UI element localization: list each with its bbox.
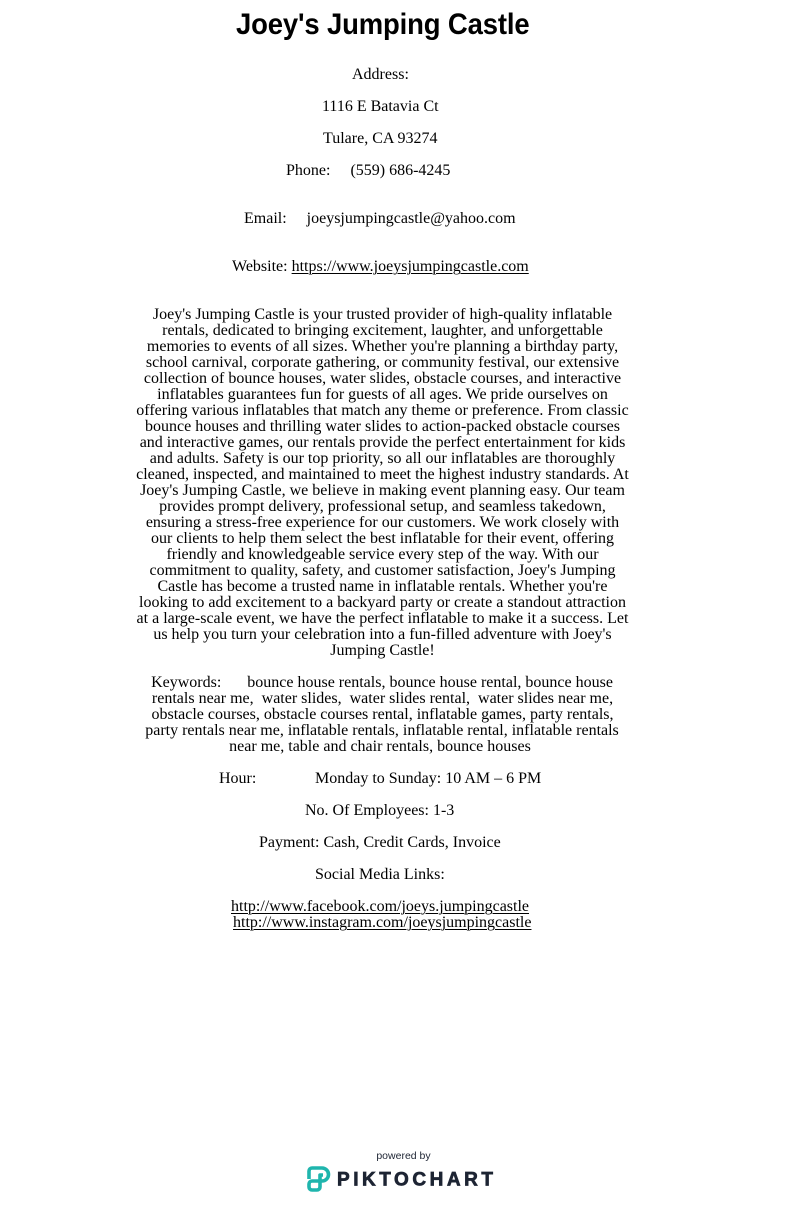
business description: inflatables guarantees fun for guests of all ages. We pride ourselves on (157, 386, 608, 403)
business description: collection of bounce houses, water slides, obstacle courses, and interactive (144, 370, 621, 387)
number of employees: No. Of Employees: 1-3 (305, 802, 454, 819)
city and zip: Tulare, CA 93274 (323, 130, 438, 147)
business description: commitment to quality, safety, and customer satisfaction, Joey's Jumping (149, 562, 616, 579)
keywords: near me, table and chair rentals, bounce houses (229, 738, 531, 755)
business description (136, 306, 629, 659)
icon: piktochart mark (309, 1168, 328, 1190)
hours (219, 770, 541, 787)
wordmark: PIKTOCHART (337, 1170, 493, 1190)
keywords (145, 674, 619, 755)
phone: Phone: (559) 686-4245 (286, 162, 450, 179)
website: Website: https://www.joeysjumpingcastle.com (232, 258, 529, 275)
social media label: Social Media Links: (315, 866, 445, 883)
keywords: party rentals near me, inflatable rentals, inflatable rental, inflatable rentals (145, 722, 619, 739)
business description: ensuring a stress-free experience for our customers. We work closely with (146, 514, 619, 531)
title: Joey's Jumping Castle (236, 8, 530, 41)
keywords: rentals near me, water slides, water slides rental, water slides near me, (152, 690, 613, 707)
payment methods: Payment: Cash, Credit Cards, Invoice (259, 834, 501, 851)
business description: Castle has become a trusted name in inflatable rentals. Whether you're (158, 578, 607, 595)
business description: Joey's Jumping Castle is your trusted provider of high-quality inflatable (153, 306, 612, 323)
powered by text: powered by (376, 1150, 431, 1162)
hours: Hour: (219, 770, 256, 787)
business description: friendly and knowledgeable service every step of the way. With our (166, 546, 599, 563)
business description: Jumping Castle! (330, 642, 435, 659)
address label: Address: (352, 66, 409, 83)
business description: offering various inflatables that match any theme or preference. From classic (136, 402, 629, 419)
business description: at a large-scale event, we have the perfect inflatable to make it a success. Let (137, 610, 628, 627)
business description: Joey's Jumping Castle, we believe in making event planning easy. Our team (140, 482, 625, 499)
business description: and adults. Safety is our top priority, so all our inflatables are thoroughly (150, 450, 615, 467)
business description: memories to events of all sizes. Whether you're planning a birthday party, (147, 338, 618, 355)
business description: provides prompt delivery, professional setup, and seamless takedown, (159, 498, 606, 515)
piktochart footer logo (307, 1150, 494, 1192)
business description: cleaned, inspected, and maintained to meet the highest industry standards. At (136, 466, 629, 483)
business description: bounce houses and thrilling water slides to action-packed obstacle courses (145, 418, 620, 435)
business description: looking to add excitement to a backyard party or create a standout attraction (139, 594, 626, 611)
business description: rentals, dedicated to bringing excitement, laughter, and unforgettable (162, 322, 603, 339)
keywords: Keywords: bounce house rentals, bounce house rental, bounce house (151, 674, 613, 691)
street address: 1116 E Batavia Ct (322, 98, 439, 115)
business description: and interactive games, our rentals provide the perfect entertainment for kids (140, 434, 625, 451)
keywords: obstacle courses, obstacle courses rental, inflatable games, party rentals, (151, 706, 614, 723)
text: Monday to Sunday: 10 AM – 6 PM (315, 770, 541, 787)
email: Email: joeysjumpingcastle@yahoo.com (244, 210, 516, 227)
instagram link: http://www.instagram.com/joeysjumpingcastle (233, 914, 531, 931)
business description: school carnival, corporate gathering, or community festival, our extensive (146, 354, 619, 371)
business description: our clients to help them select the best inflatable for their event, offering (151, 530, 614, 547)
facebook link: http://www.facebook.com/joeys.jumpingcastle (231, 898, 529, 915)
business description: us help you turn your celebration into a fun-filled adventure with Joey's (153, 626, 612, 643)
